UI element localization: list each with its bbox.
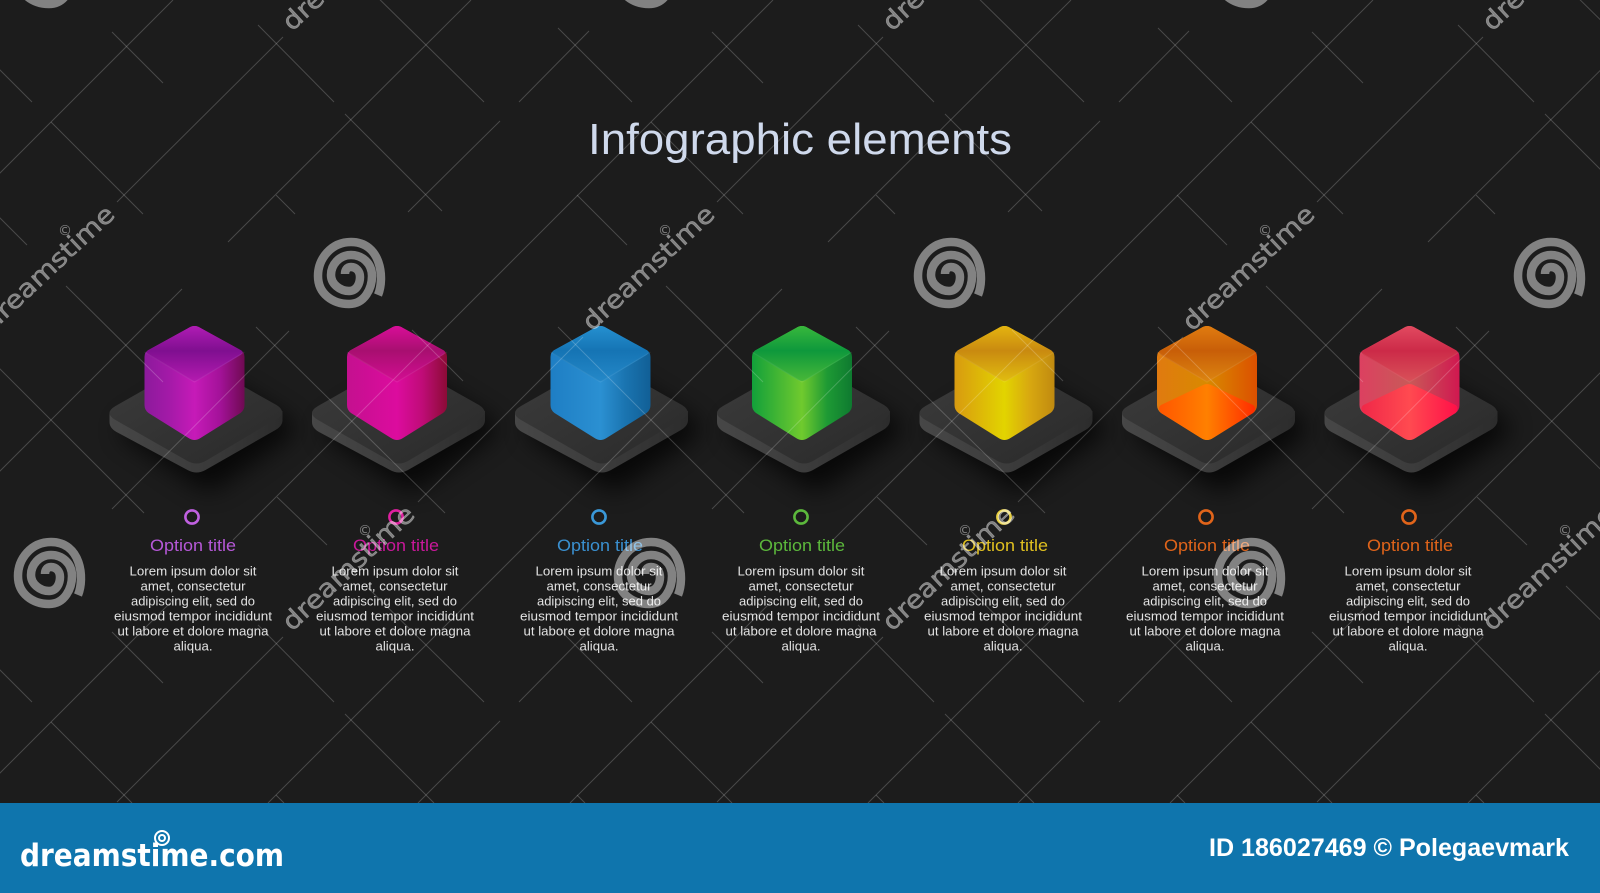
platform 6 [1122,362,1308,490]
body text 4: adipiscing elit, sed do [739,594,863,609]
watermark overlay: © [658,223,672,239]
body text 7: eiusmod tempor incididunt [1329,609,1487,624]
platform 5 [920,362,1105,490]
body text 1 [114,564,272,654]
body text 2: adipiscing elit, sed do [333,594,457,609]
body text 5: Lorem ipsum dolor sit [940,564,1067,579]
body text 5: aliqua. [984,639,1022,654]
body text 7: adipiscing elit, sed do [1346,594,1470,609]
body text 6: adipiscing elit, sed do [1143,594,1267,609]
watermark overlay: © [958,523,972,539]
body text 5: amet, consectetur [950,579,1056,594]
body text 2: aliqua. [376,639,414,654]
footer image id: ID 186027469 © Polegaevmark [1209,834,1569,862]
watermark overlay: © [1558,523,1572,539]
platform 2 [312,362,498,490]
body text 7 [1329,564,1487,654]
footer bar [0,803,1600,893]
body text 3: aliqua. [580,639,618,654]
panel: option 4 green [717,326,903,654]
watermark overlay: © [1258,223,1272,239]
body text 6: aliqua. [1186,639,1224,654]
body text 6: Lorem ipsum dolor sit [1142,564,1269,579]
option title 5: Option title [962,536,1048,555]
body text 2: ut labore et dolore magna [320,624,471,639]
body text 4: aliqua. [782,639,820,654]
body text 1: eiusmod tempor incididunt [114,609,272,624]
body text 7: Lorem ipsum dolor sit [1344,564,1472,579]
cube: green [752,326,852,440]
watermark overlay: © [58,223,72,239]
cube: magenta [347,326,447,440]
platform 4 [717,362,903,490]
body text 6: amet, consectetur [1152,579,1258,594]
body text 3: Lorem ipsum dolor sit [536,564,663,579]
platform 3 [515,362,701,490]
body text 1: ut labore et dolore magna [118,624,269,639]
panel: option 6 orange [1122,326,1308,654]
body text 4: amet, consectetur [748,579,854,594]
panel: option 3 blue [515,326,701,654]
body text 4: Lorem ipsum dolor sit [738,564,865,579]
platform 7 [1324,362,1510,490]
watermark overlay: dreamstime [876,499,1020,636]
body text 3: ut labore et dolore magna [524,624,675,639]
cube: orange [1157,326,1257,440]
body text 3: adipiscing elit, sed do [537,594,661,609]
panel: option 2 magenta [312,326,498,654]
ring marker 4 [794,510,808,524]
panel: option 5 yellow [920,326,1105,654]
watermark overlay: dreamstime [576,199,720,336]
ring marker 5 [997,510,1011,524]
body text 2 [316,564,474,654]
title: Infographic elements [588,115,1012,164]
platform 1 [110,362,295,490]
body text 1: aliqua. [174,639,212,654]
body text 1: adipiscing elit, sed do [131,594,255,609]
panel: option 1 purple [110,326,295,654]
footer logo text: dreamstime.com [20,838,284,874]
body text 1: Lorem ipsum dolor sit [130,564,257,579]
body text 2: amet, consectetur [342,579,448,594]
option title 4: Option title [759,536,845,555]
ring marker 1 [185,510,199,524]
body text 7: ut labore et dolore magna [1332,624,1484,639]
cube: red [1360,326,1460,440]
body text 4 [722,564,880,654]
option title 1: Option title [150,536,236,555]
body text 7: aliqua. [1388,639,1428,654]
body text 6 [1126,564,1284,654]
cube: purple [144,326,244,440]
ring marker 2 [389,510,403,524]
option title 7: Option title [1367,536,1453,555]
body text 7: amet, consectetur [1356,579,1461,594]
body text 5: eiusmod tempor incididunt [924,609,1082,624]
body text 5: ut labore et dolore magna [928,624,1079,639]
cube: blue [550,326,650,440]
option title 6: Option title [1164,536,1250,555]
body text 6: eiusmod tempor incididunt [1126,609,1284,624]
panel: option 7 red [1324,326,1510,654]
body text 5: adipiscing elit, sed do [941,594,1065,609]
watermark overlay: dreamstime [1176,199,1320,336]
ring marker 6 [1199,510,1213,524]
body text 3: eiusmod tempor incididunt [520,609,678,624]
body text 4: eiusmod tempor incididunt [722,609,880,624]
option title 3: Option title [557,536,643,555]
footer logo spiral [155,831,169,845]
ring marker 7 [1402,510,1416,524]
watermark overlay: dreamstime [276,499,420,636]
body text 4: ut labore et dolore magna [726,624,877,639]
body text 5 [924,564,1082,654]
body text 2: Lorem ipsum dolor sit [332,564,459,579]
cube: yellow [954,326,1054,440]
body text 3 [520,564,678,654]
body text 3: amet, consectetur [546,579,652,594]
option title 2: Option title [353,536,439,555]
watermark overlay: © [358,523,372,539]
body text 6: ut labore et dolore magna [1130,624,1281,639]
body text 2: eiusmod tempor incididunt [316,609,474,624]
ring marker 3 [592,510,606,524]
body text 1: amet, consectetur [140,579,246,594]
